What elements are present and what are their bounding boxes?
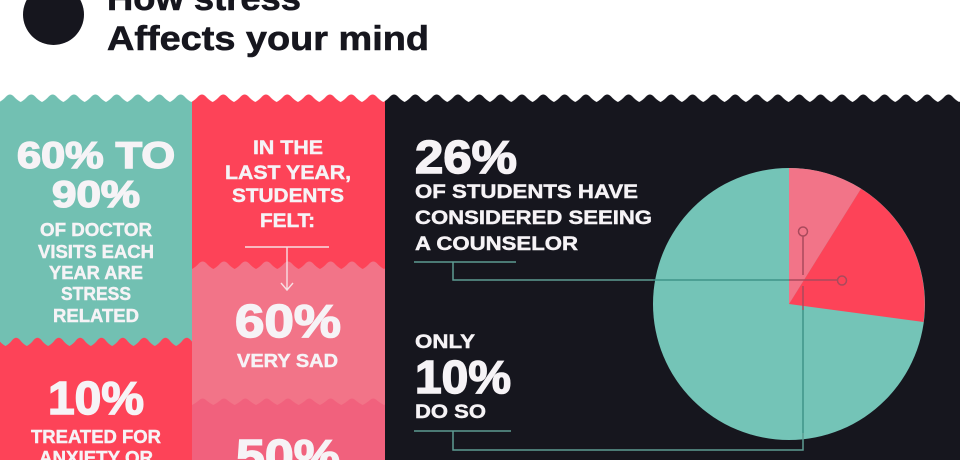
stat: 10%: 10% xyxy=(415,351,511,403)
text: considered seeing a counselor: A COUNSELOR xyxy=(415,234,578,255)
panel: counseling xyxy=(385,94,960,460)
stat: 60% to 90% xyxy=(17,135,175,215)
text: in the last year: LAST YEAR, xyxy=(225,163,351,184)
text: in the last year: IN THE xyxy=(253,138,323,159)
text: doctor visits description: YEAR ARE xyxy=(49,263,143,283)
pie chart xyxy=(653,168,925,440)
text: very sad: VERY SAD xyxy=(237,351,338,371)
text: considered seeing a counselor: CONSIDERED SEEING xyxy=(415,208,652,229)
text: doctor visits description: VISITS EACH xyxy=(38,242,154,262)
text: in the last year: STUDENTS xyxy=(232,186,344,207)
icon: black circle xyxy=(23,0,84,45)
panel: treated for anxiety xyxy=(0,337,192,460)
text: considered seeing a counselor xyxy=(415,182,652,255)
stat: 60%: 60% xyxy=(235,295,341,347)
text: doctor visits description: STRESS xyxy=(61,284,131,304)
title: Affects your mind xyxy=(107,20,429,58)
text: considered seeing a counselor: OF STUDENTS HAVE xyxy=(415,182,638,203)
panel: very sad xyxy=(192,261,385,405)
stat: 10%: 10% xyxy=(48,372,144,424)
text: only: ONLY xyxy=(415,332,475,353)
text: doctor visits description xyxy=(38,220,154,326)
text: doctor visits description: RELATED xyxy=(53,306,139,326)
text: doctor visits description: OF DOCTOR xyxy=(40,220,152,240)
panel: students felt xyxy=(192,94,385,270)
text: in the last year: FELT: xyxy=(260,211,315,232)
title xyxy=(107,0,429,58)
leader line: counselor to pie xyxy=(414,262,846,285)
text: in the last year xyxy=(225,138,351,232)
text: treated for anxiety xyxy=(31,427,161,460)
stat: 26%: 26% xyxy=(415,131,517,183)
panel: doctor visits xyxy=(0,94,192,346)
text: treated for anxiety: TREATED FOR xyxy=(31,427,161,447)
arrow: down to stats xyxy=(245,247,329,290)
leader line: do so to pie xyxy=(414,227,808,450)
text: do so: DO SO xyxy=(415,402,486,423)
panel: 50% xyxy=(192,398,385,460)
header xyxy=(23,0,429,58)
stat: 60% to 90%: 90% xyxy=(52,174,140,215)
wavy top edge xyxy=(0,94,960,102)
stat: 60% to 90%: 60% TO xyxy=(17,135,175,176)
